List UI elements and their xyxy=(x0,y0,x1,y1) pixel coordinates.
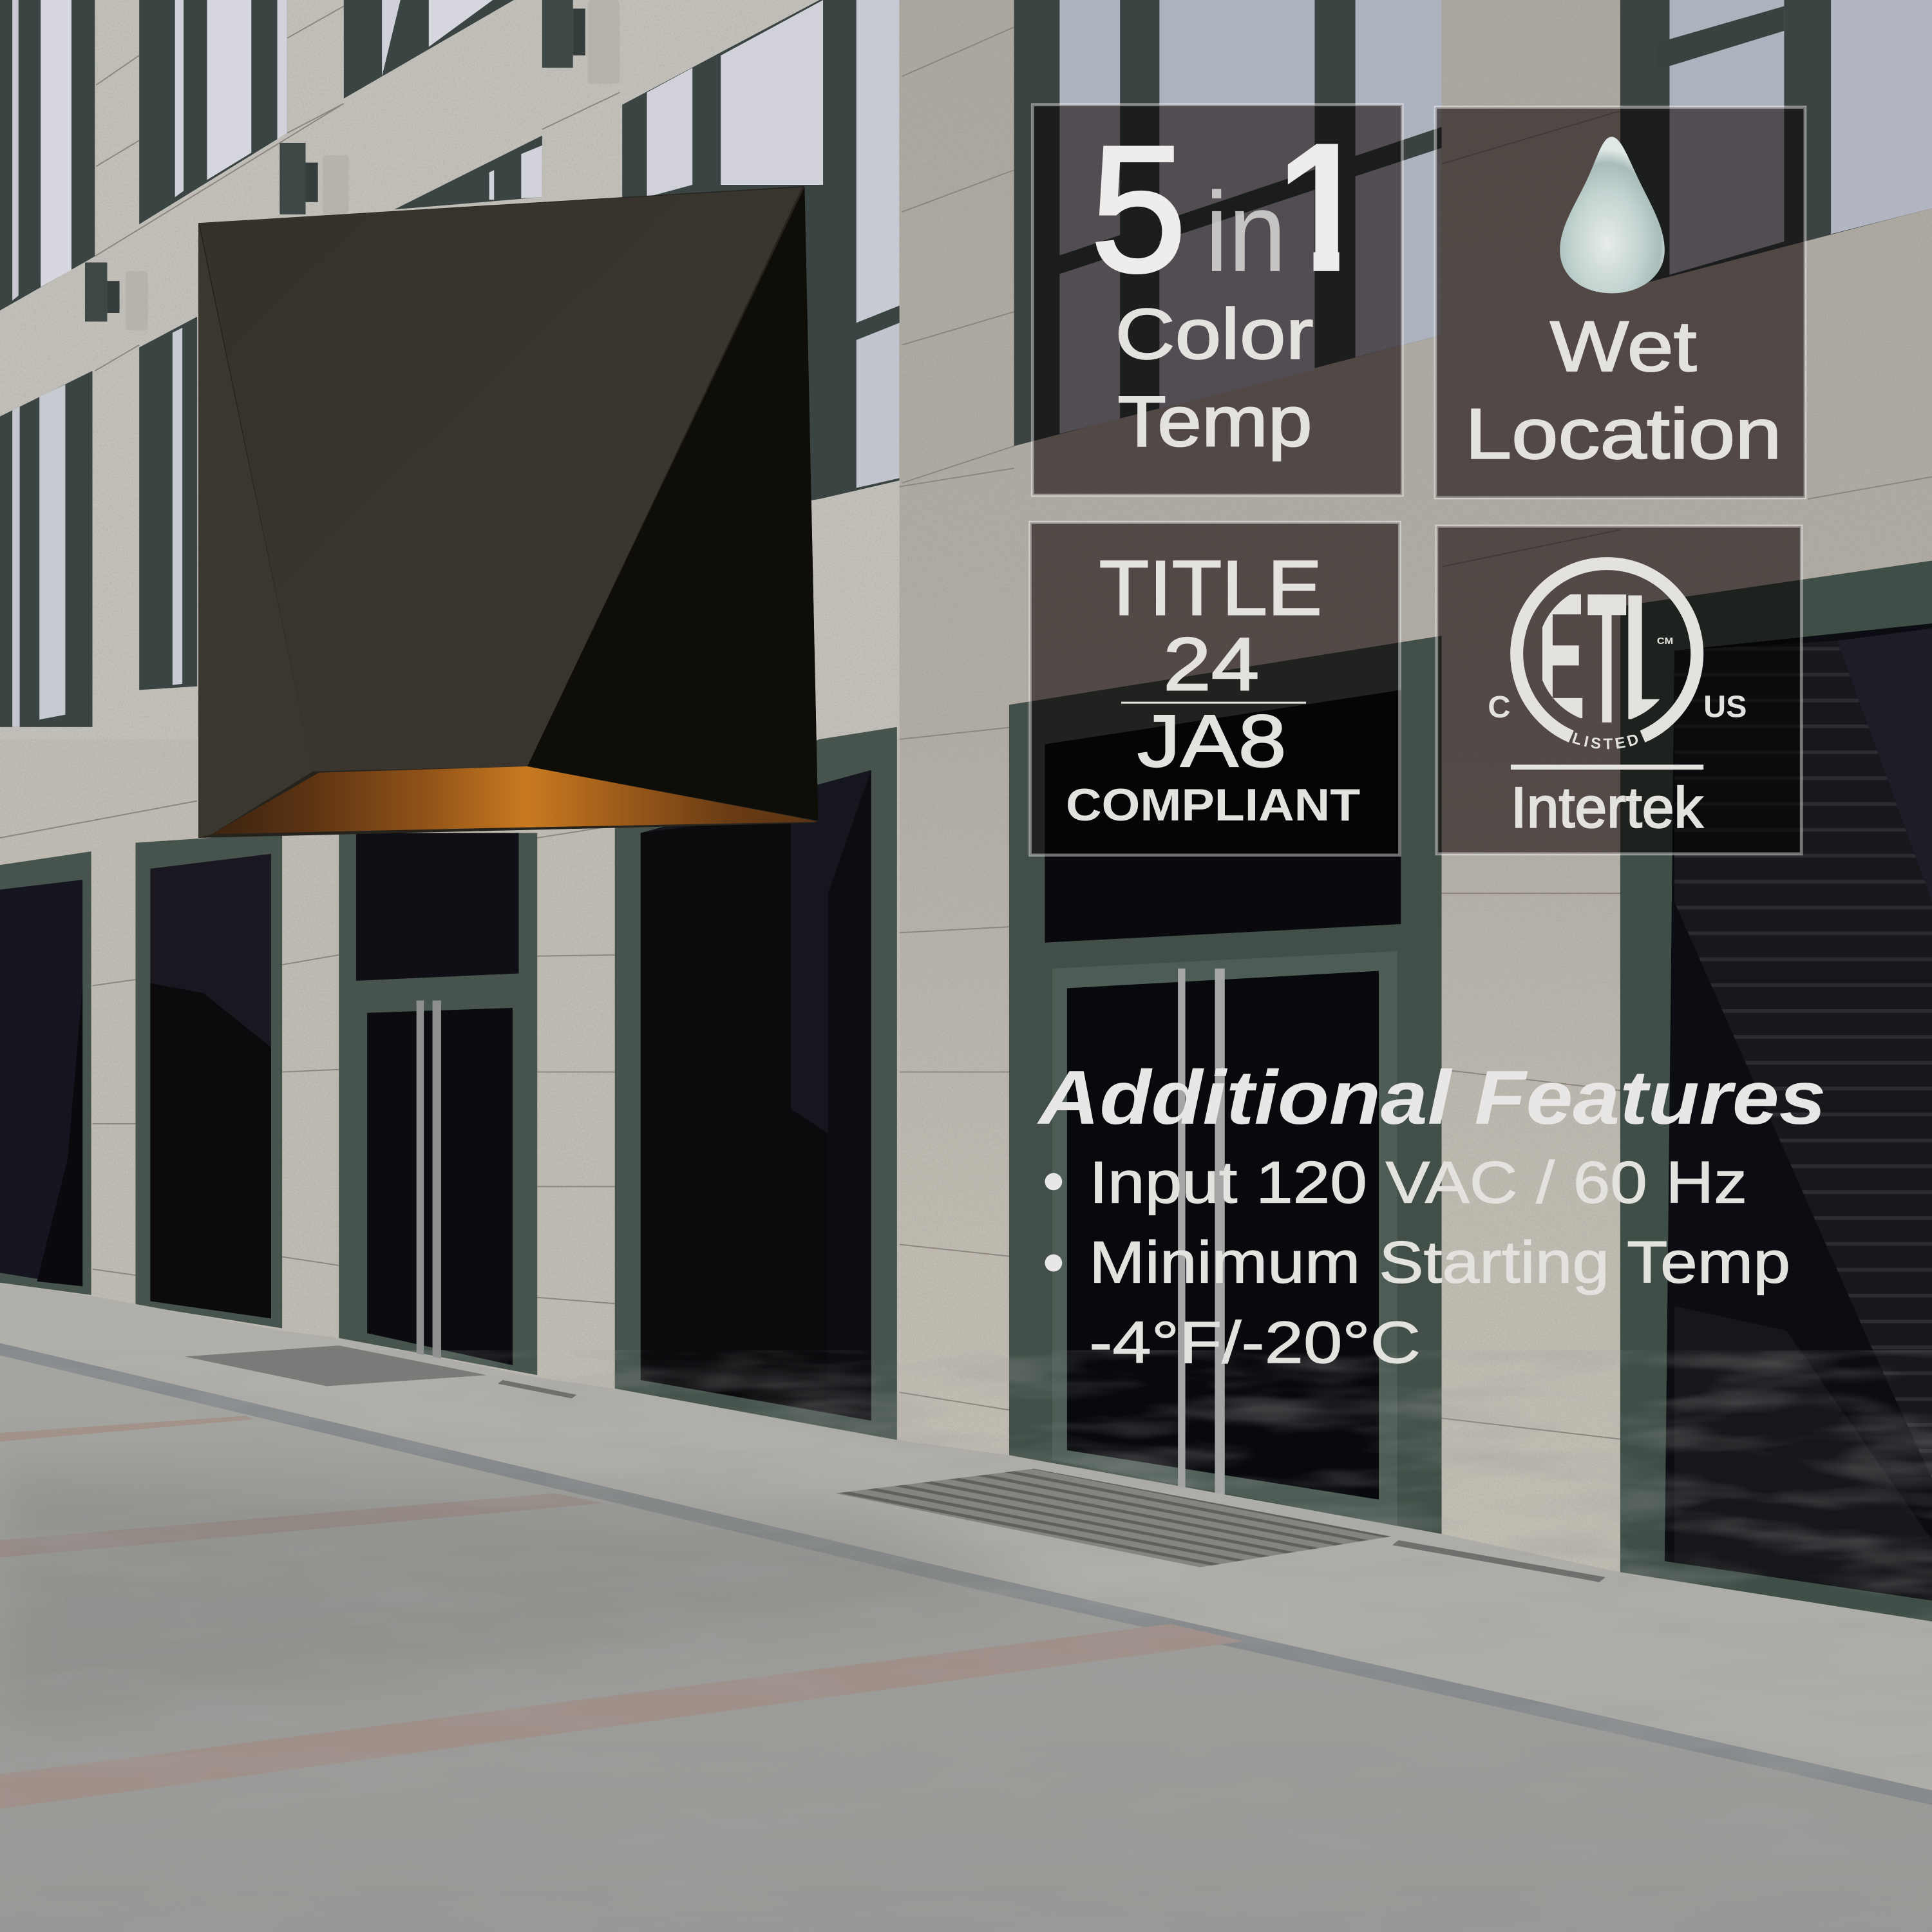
lower storefront glass and frames xyxy=(0,561,1932,1622)
label: 24: 24 xyxy=(1163,621,1259,706)
product: angular wall lamp xyxy=(198,186,818,838)
icon: ETL listed mark: C xyxy=(1488,690,1511,724)
label: wet location: Location xyxy=(1465,394,1782,474)
panel: ETL listed Intertek xyxy=(1435,524,1803,855)
heading: 5 in 1: 5 xyxy=(1090,109,1186,310)
window three and door xyxy=(339,833,537,1375)
label: color temp xyxy=(1115,294,1314,462)
heading: 5 in 1 xyxy=(1095,144,1340,274)
text block: additional features xyxy=(1037,1056,1826,1376)
small wall sconces on the upper facade xyxy=(85,0,620,330)
heading: additional features: Additional Features xyxy=(1037,1056,1826,1141)
lamp right shadow face xyxy=(527,187,818,820)
lamp amber underside xyxy=(212,766,818,834)
icon: ETL listed mark: CM xyxy=(1657,636,1673,647)
stone joints xyxy=(0,6,1932,1439)
pavement xyxy=(0,1283,1932,1932)
panel: title 24 JA8 compliant xyxy=(1030,522,1399,855)
panel: wet location xyxy=(1435,107,1805,498)
right window xyxy=(1620,561,1932,1622)
label: color temp: Color xyxy=(1115,294,1314,374)
icon: water drop xyxy=(1560,137,1665,293)
heading: 5 in 1: 1 xyxy=(1276,104,1369,310)
lamp front face xyxy=(200,187,802,772)
heading: 5 in 1: in xyxy=(1205,169,1286,296)
icon: ETL listed mark: US xyxy=(1703,689,1747,724)
icon: ETL listed mark: E xyxy=(1538,556,1586,757)
bullet: minimum starting temperature: Minimum Starting Temp xyxy=(1089,1230,1790,1296)
label: compliant: COMPLIANT xyxy=(1066,780,1360,831)
label: title: TITLE xyxy=(1099,545,1322,632)
bullet: input voltage: Input 120 VAC / 60 Hz xyxy=(1089,1150,1747,1215)
window two xyxy=(135,833,282,1328)
icon: ETL listed mark: L xyxy=(1622,557,1680,758)
label: color temp: Temp xyxy=(1117,382,1312,462)
panel: 5 in 1 color temp xyxy=(1032,104,1402,495)
lamp left face xyxy=(198,223,313,838)
bullet: minimum starting temperature: -4°F/-20°C xyxy=(1089,1310,1421,1376)
window one xyxy=(0,851,91,1295)
label: wet location xyxy=(1465,307,1782,474)
icon: ETL listed mark: LISTED xyxy=(1572,733,1638,750)
entry doors xyxy=(1009,636,1442,1534)
label: wet location: Wet xyxy=(1550,307,1697,386)
icon: ETL listed mark: Intertek xyxy=(1511,775,1703,839)
icon: ETL listed mark xyxy=(1488,557,1747,839)
window four xyxy=(615,727,897,1441)
label: JA8: JA8 xyxy=(1137,700,1286,782)
icon: ETL listed mark: T xyxy=(1587,555,1627,762)
bullet: minimum starting temperature xyxy=(1045,1230,1790,1376)
upper windows xyxy=(0,0,1932,727)
